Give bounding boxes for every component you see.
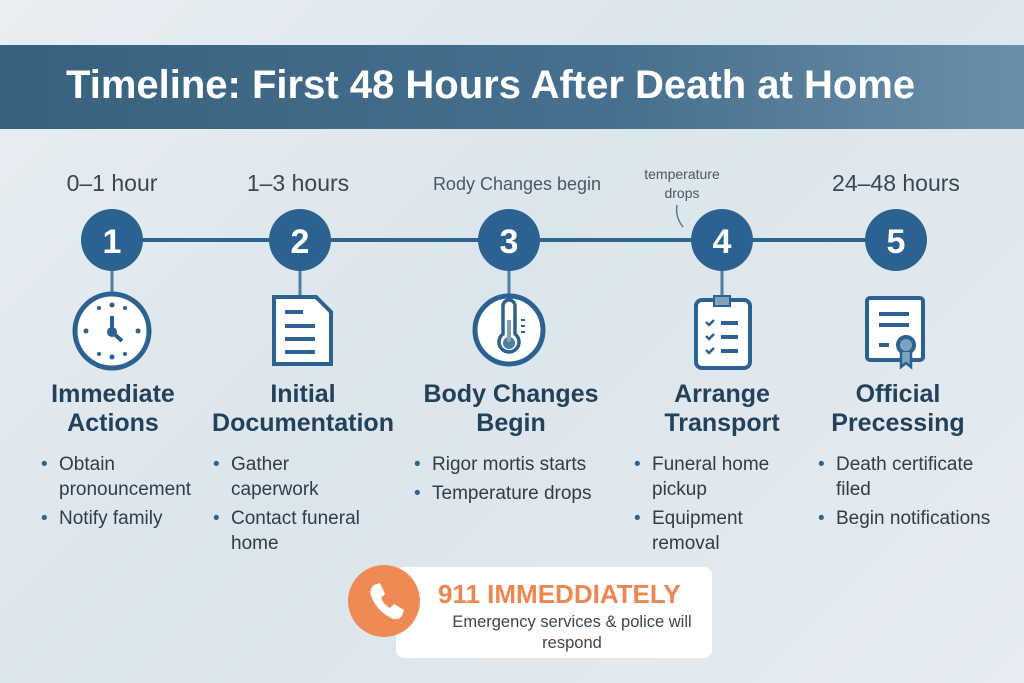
headings: Actions: [67, 409, 159, 437]
text: Official: [856, 380, 940, 408]
text: Funeral home: [652, 454, 769, 475]
icon: clock: [75, 294, 149, 368]
timeline: 3: [500, 223, 518, 261]
text: 1–3 hours: [247, 170, 349, 196]
icon: thermometer: [475, 296, 543, 364]
step circles: [81, 209, 927, 271]
text: Equipment: [652, 508, 743, 529]
text: 24–48 hours: [832, 170, 960, 196]
text: Transport: [664, 409, 780, 437]
timeline: 4: [713, 223, 732, 261]
text: Gather: [231, 454, 289, 475]
text: Death certificate: [836, 454, 973, 475]
text: Begin notifications: [836, 508, 990, 529]
headings: [51, 380, 175, 437]
text: removal: [652, 533, 720, 554]
timeline: 2: [291, 223, 309, 261]
bullets: [42, 454, 191, 529]
bullets: pronouncement: [59, 479, 191, 500]
text: Contact funeral: [231, 508, 360, 529]
text: Begin: [476, 409, 546, 437]
timeline: 1: [103, 223, 121, 261]
text: drops: [664, 185, 700, 201]
text: temperature: [644, 166, 720, 182]
text: Initial: [270, 380, 336, 408]
text: filed: [836, 479, 871, 500]
text: Temperature drops: [432, 483, 591, 504]
text: Rigor mortis starts: [432, 454, 586, 475]
text: Body Changes: [423, 380, 599, 408]
title banner: Timeline: First 48 Hours After Death at Home: [66, 63, 915, 107]
bullets: Obtain: [59, 454, 115, 475]
headings: Immediate: [51, 380, 175, 408]
timeline: 5: [887, 223, 905, 261]
icon: certificate: [867, 298, 923, 367]
bullets: Notify family: [59, 508, 162, 529]
text: Arrange: [674, 380, 770, 408]
time labels: 0–1 hour: [67, 170, 157, 196]
callout: 911: 911 IMMEDDIATELY: [438, 579, 681, 609]
text: caperwork: [231, 479, 319, 500]
icon: phone: [348, 565, 420, 637]
text: Documentation: [212, 409, 394, 437]
title banner: [0, 45, 1024, 129]
callout: 911: Emergency services & police will respond: [452, 613, 692, 652]
text: Precessing: [831, 409, 965, 437]
callout: 911: [348, 565, 712, 658]
text: Rody Changes begin: [433, 174, 601, 194]
text: pickup: [652, 479, 707, 500]
icon: clipboard: [696, 296, 750, 368]
icon: document: [274, 297, 331, 364]
text: home: [231, 533, 279, 554]
